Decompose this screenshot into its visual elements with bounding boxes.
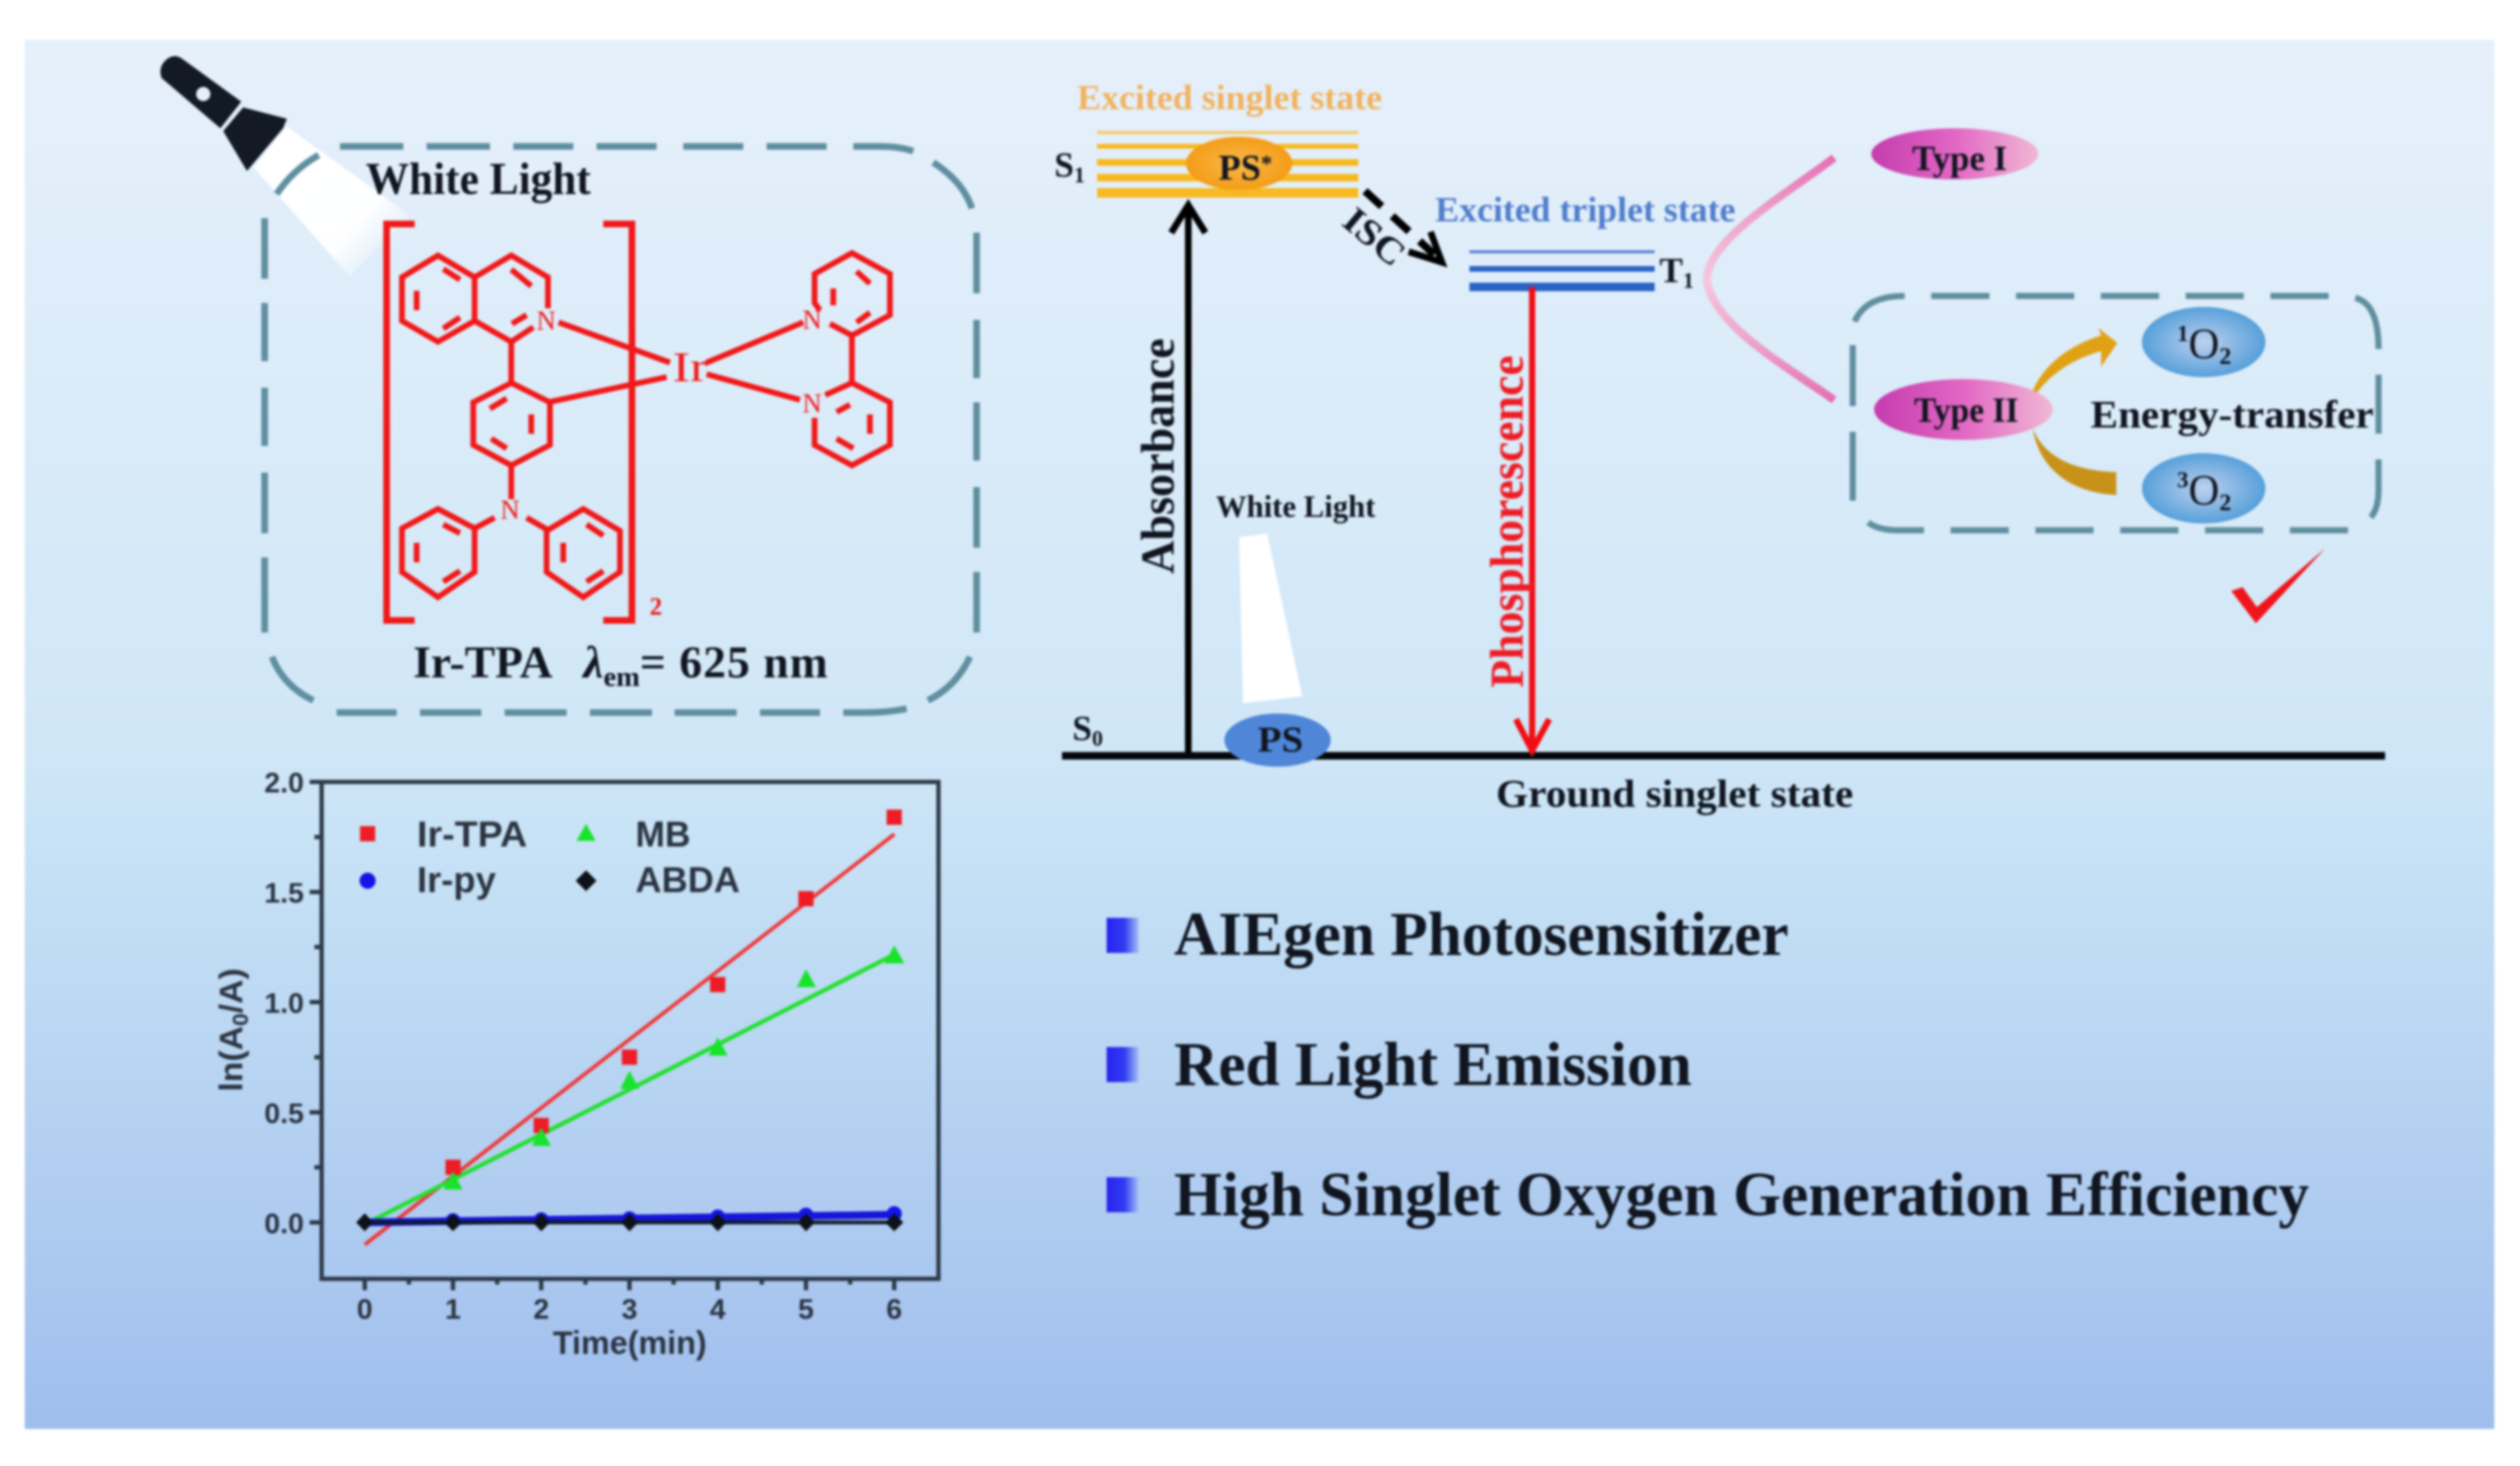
triplet oxygen ellipse: 3 — [2177, 468, 2188, 493]
icon: check mark — [2231, 548, 2325, 623]
panel: Jablonski energy diagram — [1054, 79, 2385, 815]
x axis tick labels: 1 — [445, 1294, 461, 1325]
plot frame and ticks — [310, 782, 938, 1290]
white light beam — [1239, 534, 1302, 703]
panel: molecular structure dashed box — [265, 146, 976, 713]
x axis tick labels: 6 — [886, 1294, 902, 1325]
T1 energy levels — [1469, 252, 1655, 287]
legend: Ir-TPA — [417, 815, 527, 855]
triplet oxygen ellipse — [2142, 453, 2265, 524]
x axis tick labels: 2 — [533, 1294, 549, 1325]
y axis tick labels: 1.0 — [264, 988, 304, 1019]
arrow: from triplet oxygen — [2033, 428, 2116, 495]
series: MB — [444, 945, 904, 1190]
label: phosphorescence: Phosphorescence — [1480, 355, 1533, 688]
y axis title: ln(A — [214, 1029, 250, 1092]
point 3: High Singlet Oxygen Generation Efficiency — [1174, 1160, 2309, 1229]
series: ABDA — [356, 1213, 903, 1231]
chemical structure Ir-TPA: Ir — [673, 344, 708, 390]
singlet oxygen ellipse: 2 — [2219, 344, 2231, 370]
panel: energy transfer dashed box — [1853, 295, 2378, 530]
y axis title: /A) — [214, 968, 250, 1013]
x axis title: Time(min) — [553, 1325, 707, 1361]
arrow: absorbance — [1171, 205, 1205, 754]
heading: white light: White Light — [366, 154, 591, 204]
legend — [359, 815, 740, 901]
chemical structure Ir-TPA: N — [501, 496, 520, 525]
Type II ellipse: Type II — [1914, 391, 2018, 430]
Type II ellipse — [1874, 379, 2053, 440]
compound label: = 625 nm — [640, 638, 828, 688]
series: Ir-py — [445, 1207, 901, 1228]
label: absorbance: Absorbance — [1130, 338, 1184, 574]
key points list — [1107, 900, 2309, 1229]
label: S0: S — [1072, 710, 1092, 749]
label: excited singlet state: Excited singlet state — [1077, 79, 1382, 118]
x axis tick labels: 4 — [710, 1294, 726, 1325]
chemical structure Ir-TPA: 2 — [650, 593, 662, 620]
chemical structure Ir-TPA — [387, 224, 890, 620]
PS excited ellipse: * — [1260, 152, 1272, 177]
x axis tick labels: 5 — [798, 1294, 814, 1325]
y axis tick labels: 0.0 — [264, 1209, 304, 1240]
fit lines — [365, 834, 895, 1245]
singlet oxygen ellipse — [2142, 307, 2265, 377]
Type I ellipse — [1871, 128, 2038, 180]
legend: ABDA — [635, 861, 740, 901]
chemical structure Ir-TPA: N — [803, 390, 822, 419]
label: T1: T — [1659, 252, 1683, 291]
ground state line — [1062, 752, 2385, 760]
chart: ln(A0/A) versus time — [214, 768, 938, 1361]
series: Ir-TPA — [445, 809, 901, 1175]
singlet oxygen ellipse: 1 — [2177, 322, 2188, 347]
label: S0: 0 — [1092, 727, 1103, 751]
dashed frame — [1853, 295, 2378, 530]
label: white light small: White Light — [1216, 490, 1375, 524]
y axis title: 0 — [228, 1013, 253, 1026]
y axis tick labels: 2.0 — [264, 768, 304, 799]
compound label: em — [603, 661, 640, 693]
PS ground ellipse — [1224, 714, 1331, 767]
y axis tick labels: 1.5 — [264, 878, 304, 909]
label: energy transfer: Energy-transfer — [2091, 392, 2374, 436]
S1 energy levels — [1097, 133, 1358, 193]
point 2: Red Light Emission — [1174, 1030, 1692, 1099]
singlet oxygen ellipse: O — [2188, 320, 2219, 368]
label: ground singlet state: Ground singlet state — [1496, 771, 1853, 815]
arrow: to singlet oxygen — [2033, 328, 2117, 392]
legend: MB — [635, 815, 691, 855]
triplet oxygen ellipse: O — [2188, 466, 2219, 514]
label: excited triplet state: Excited triplet state — [1435, 191, 1735, 230]
chemical structure Ir-TPA: N — [803, 306, 822, 335]
y axis tick labels — [264, 768, 304, 1240]
compound label: Ir-TPA — [413, 638, 553, 688]
arrow: phosphorescence — [1516, 287, 1549, 751]
x axis tick labels — [357, 1294, 902, 1325]
arrow: intersystem crossing — [1365, 191, 1442, 262]
chemical structure Ir-TPA: N — [537, 307, 556, 336]
Type I ellipse: Type I — [1912, 140, 2007, 179]
PS excited ellipse — [1185, 137, 1292, 190]
legend: Ir-py — [417, 861, 496, 901]
x axis tick labels: 3 — [621, 1294, 637, 1325]
PS ground ellipse: PS — [1258, 720, 1303, 760]
label: ISC: ISC — [1335, 200, 1413, 275]
compound label: λ — [581, 638, 603, 688]
dashed frame — [265, 146, 976, 713]
label: S1: 1 — [1074, 163, 1085, 187]
label: T1: 1 — [1683, 269, 1694, 293]
PS excited ellipse: PS — [1219, 148, 1260, 188]
triplet oxygen ellipse: 2 — [2219, 490, 2231, 516]
label: S1: S — [1054, 146, 1074, 185]
x axis tick labels: 0 — [357, 1294, 372, 1325]
icon: flashlight with white beam — [161, 56, 410, 276]
y axis tick labels: 0.5 — [264, 1098, 304, 1130]
branching curve — [1707, 158, 1834, 400]
point 1: AIEgen Photosensitizer — [1174, 900, 1789, 969]
